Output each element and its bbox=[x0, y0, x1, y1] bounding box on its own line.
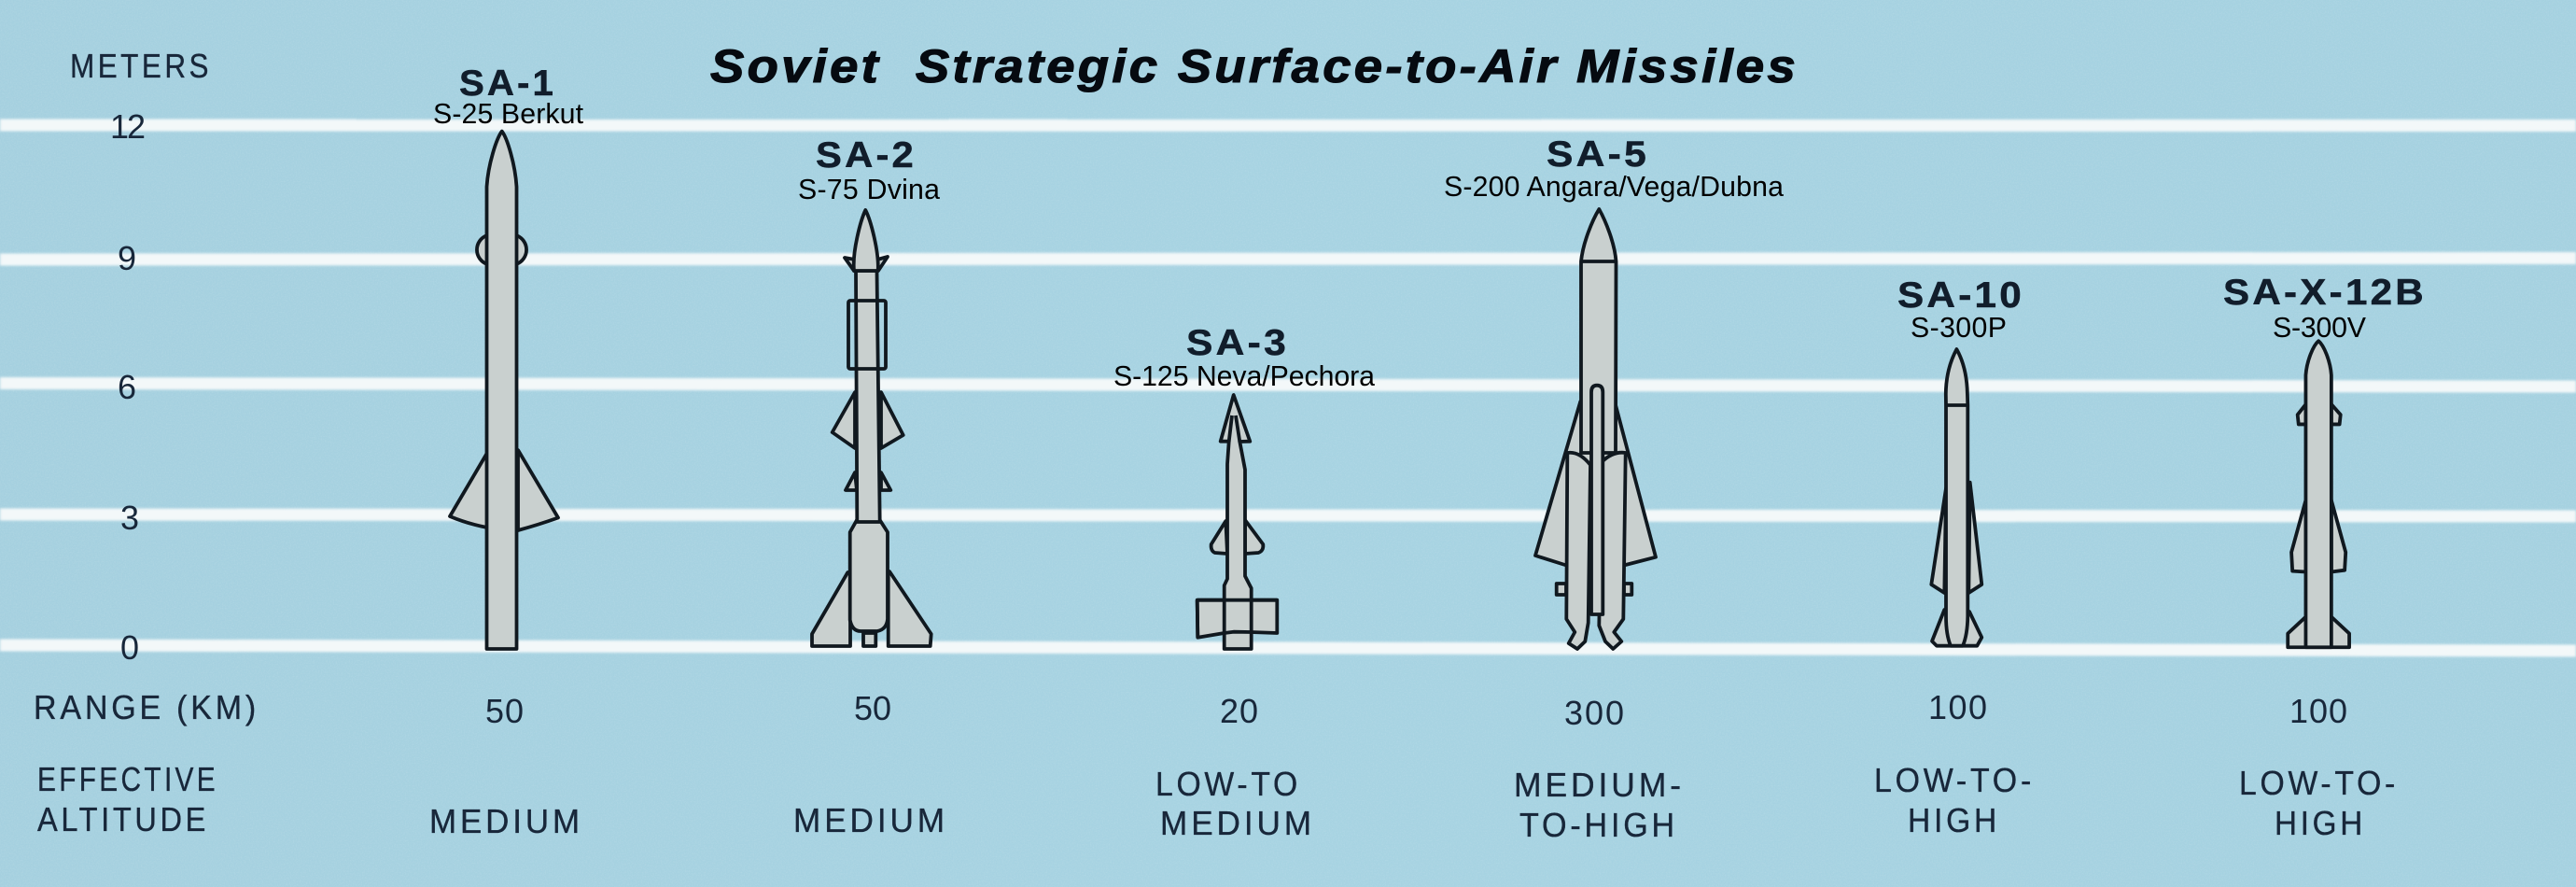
altitude: SA-X-12B bbox=[2239, 764, 2399, 842]
label: SA-X-12B: S-300V bbox=[2273, 313, 2367, 344]
label: SA-3: SA-3 bbox=[1186, 323, 1289, 363]
missile: SA-3 bbox=[1197, 395, 1277, 649]
altitude: SA-3: MEDIUM bbox=[1160, 804, 1315, 842]
label: SA-X-12B: SA-X-12B bbox=[2223, 273, 2427, 313]
missile: SA-2 bbox=[812, 210, 931, 646]
altitude: SA-10 bbox=[1874, 761, 2035, 839]
label: SA-X-12B bbox=[2223, 273, 2427, 344]
label: SA-5 bbox=[1444, 134, 1784, 203]
label: SA-5: SA-5 bbox=[1547, 134, 1649, 175]
label: SA-10 bbox=[1897, 275, 2024, 344]
altitude: SA-X-12B: HIGH bbox=[2275, 804, 2366, 842]
altitude: SA-10: HIGH bbox=[1908, 801, 2000, 839]
altitude: SA-5: MEDIUM- bbox=[1514, 766, 1685, 804]
missile: SA-1 bbox=[450, 132, 558, 649]
axis scale labels: 0 bbox=[120, 628, 139, 667]
label: SA-2: S-75 Dvina bbox=[798, 175, 940, 205]
missile: SA-X-12B bbox=[2288, 341, 2349, 647]
label: SA-5: S-200 Angara/Vega/Dubna bbox=[1444, 172, 1784, 203]
label: SA-10: S-300P bbox=[1911, 313, 2007, 344]
axis scale labels: 6 bbox=[118, 368, 136, 406]
altitude: SA-5 bbox=[1514, 766, 1685, 844]
label: SA-3 bbox=[1113, 323, 1375, 392]
altitude: SA-10: LOW-TO- bbox=[1874, 761, 2035, 799]
label: SA-3: S-125 Neva/Pechora bbox=[1113, 361, 1375, 392]
altitude: SA-X-12B: LOW-TO- bbox=[2239, 764, 2399, 802]
axis scale labels: 3 bbox=[120, 499, 139, 537]
axis scale labels bbox=[110, 107, 146, 667]
axis scale labels: 12 bbox=[110, 107, 146, 146]
axis heading: meters: METERS bbox=[70, 47, 212, 85]
row label: effective altitude: ALTITUDE bbox=[37, 800, 209, 838]
range: SA-5: 300 bbox=[1564, 694, 1624, 732]
label: SA-2 bbox=[798, 135, 940, 205]
altitude: SA-2: MEDIUM bbox=[793, 801, 948, 839]
axis scale labels: 9 bbox=[118, 239, 136, 277]
missile: SA-10 bbox=[1931, 349, 1981, 646]
row label: range: RANGE (KM) bbox=[34, 688, 259, 726]
range: SA-X-12B: 100 bbox=[2289, 692, 2347, 730]
label: SA-2: SA-2 bbox=[816, 135, 917, 176]
label: SA-10: SA-10 bbox=[1897, 275, 2024, 316]
missile: SA-5 bbox=[1535, 209, 1656, 649]
title: Soviet Strategic Surface-to-Air Missiles bbox=[710, 40, 1799, 92]
row label: effective altitude bbox=[37, 760, 218, 838]
altitude: SA-1: MEDIUM bbox=[429, 802, 583, 840]
label: SA-1: SA-1 bbox=[459, 63, 556, 104]
altitude: SA-3 bbox=[1155, 765, 1315, 842]
row label: effective altitude: EFFECTIVE bbox=[37, 760, 218, 798]
range: SA-3: 20 bbox=[1220, 692, 1258, 730]
range: SA-10: 100 bbox=[1928, 688, 1987, 726]
range: SA-2: 50 bbox=[854, 689, 891, 727]
altitude: SA-5: TO-HIGH bbox=[1519, 806, 1678, 844]
altitude: SA-3: LOW-TO bbox=[1155, 765, 1301, 803]
label: SA-1: S-25 Berkut bbox=[433, 99, 584, 130]
label: SA-1 bbox=[433, 63, 584, 130]
range: SA-1: 50 bbox=[485, 692, 524, 730]
